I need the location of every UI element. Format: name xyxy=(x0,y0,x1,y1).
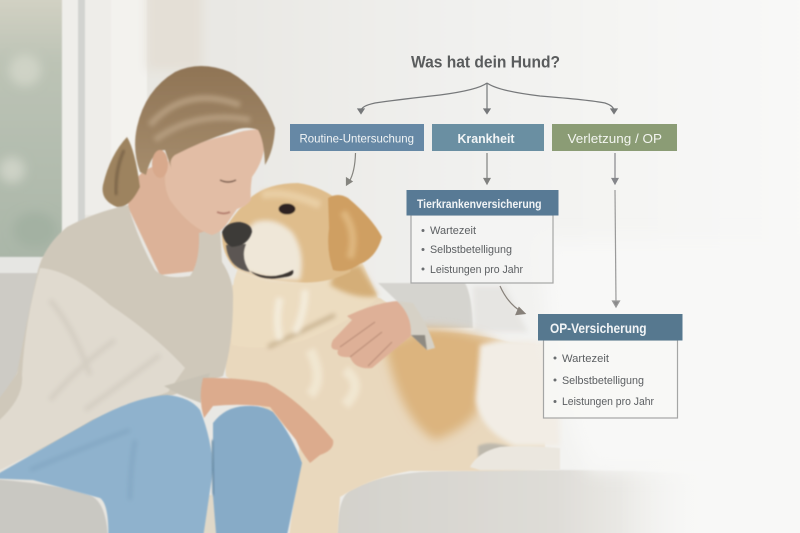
woman: sleeve xyxy=(0,268,185,480)
box: OP-Versicherung: Leistungen pro Jahr xyxy=(562,396,654,408)
arrow: Krankheit down xyxy=(484,153,490,184)
box: OP-Versicherung: OP-Versicherung xyxy=(550,320,646,336)
arrow: long to OP-Versicherung xyxy=(612,190,620,307)
category: Krankheit: Krankheit xyxy=(458,131,515,146)
dog: body xyxy=(225,285,545,533)
woman: ponytail xyxy=(103,137,140,207)
sofa seat left xyxy=(0,478,108,533)
photo: dog xyxy=(222,183,560,533)
box: Tierkrankenversicherung xyxy=(406,190,558,283)
box: Tierkrankenversicherung: Selbstbetelligung xyxy=(430,244,512,256)
category: Routine-Untersuchung xyxy=(290,124,424,151)
upper sleeve cuff xyxy=(397,301,435,350)
box: Tierkrankenversicherung: Tierkrankenversicherung xyxy=(417,197,542,211)
category: Routine-Untersuchung: Routine-Untersuchung xyxy=(300,132,414,146)
sofa back right xyxy=(378,283,473,328)
category: Krankheit xyxy=(432,124,544,151)
arrows from title to categories xyxy=(358,83,617,114)
dog: head xyxy=(222,183,355,283)
dog: ear xyxy=(328,195,382,271)
box: OP-Versicherung xyxy=(538,314,682,418)
dog: white rump xyxy=(476,340,560,446)
photo: jeans, arm and hand xyxy=(0,301,435,533)
woman: face xyxy=(165,130,265,235)
photo fade toward the right xyxy=(540,240,800,533)
woman: ear xyxy=(152,150,168,178)
jeans: left leg xyxy=(0,395,213,533)
dog: golden saddle xyxy=(385,328,500,440)
box: Tierkrankenversicherung: Leistungen pro Jahr xyxy=(430,264,523,276)
jeans: right leg xyxy=(213,406,302,533)
dog: curly back fur xyxy=(310,350,355,405)
sofa back left xyxy=(0,257,40,273)
woman: sweater xyxy=(0,205,233,478)
title: Was hat dein Hund? xyxy=(411,54,560,72)
woman: cuff xyxy=(164,373,210,403)
woman: hair xyxy=(135,66,275,175)
box: OP-Versicherung: Selbstbetelligung xyxy=(562,375,644,387)
dog: eye xyxy=(278,204,296,214)
woman: neck xyxy=(128,165,215,275)
upper hand on dog xyxy=(331,301,413,368)
box: Tierkrankenversicherung: Wartezeit xyxy=(430,225,476,237)
dog: chest ruff xyxy=(230,262,378,348)
box: OP-Versicherung: Wartezeit xyxy=(562,353,609,365)
arrow: Verletzung down xyxy=(612,153,618,184)
arrow: Routine-Untersuchung down xyxy=(346,153,356,185)
arm and lower hand xyxy=(201,378,333,463)
category: Verletzung / OP xyxy=(552,124,677,151)
category: Verletzung / OP: Verletzung / OP xyxy=(568,131,662,146)
photo: woman xyxy=(0,66,275,480)
dog: paw xyxy=(470,446,560,470)
sofa seat right xyxy=(337,470,700,533)
arrow: Tierkrankenversicherung to OP-Versicherung xyxy=(500,286,525,314)
dog: nose and mouth xyxy=(222,222,293,279)
